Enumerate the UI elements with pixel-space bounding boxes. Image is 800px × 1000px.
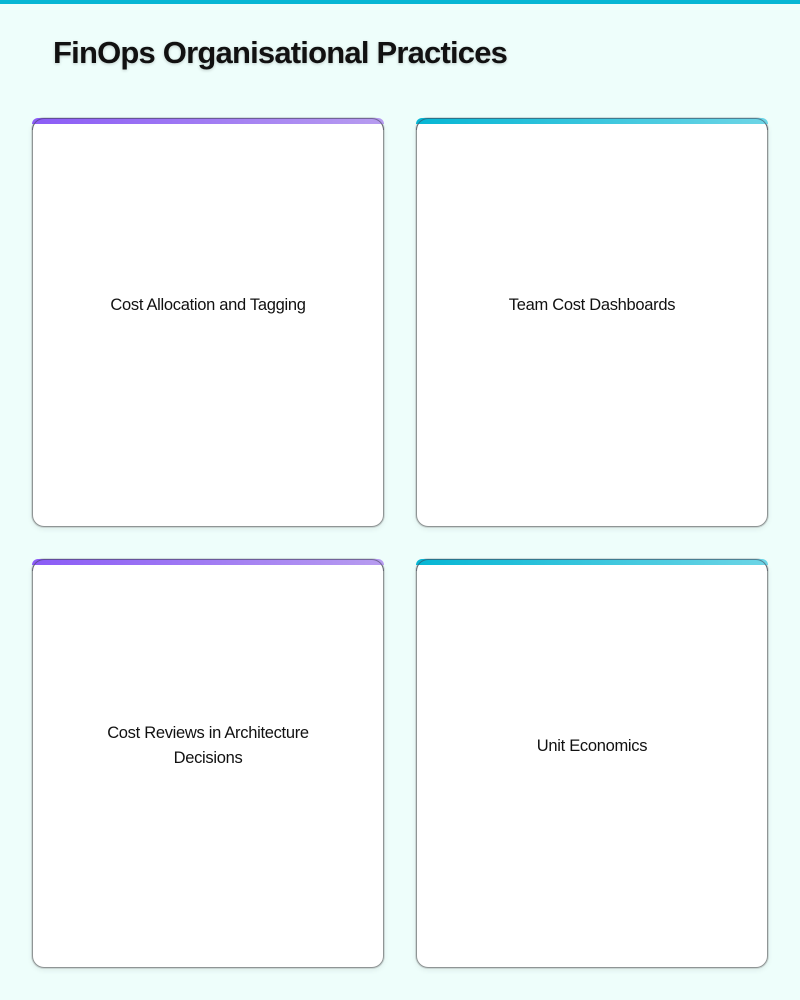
card label: cost reviews <box>107 724 309 767</box>
panel: unit economics <box>416 559 768 968</box>
panel: cost reviews in architecture decisions <box>32 559 384 968</box>
purple card header bar <box>32 559 384 565</box>
card label: cost reviews: Decisions <box>174 749 242 767</box>
teal card header bar <box>416 118 768 124</box>
card label: cost allocation: Cost Allocation and Tagging <box>110 296 306 314</box>
card label: cost reviews: Cost Reviews in Architecture <box>107 724 309 742</box>
panel: cost allocation and tagging <box>32 118 384 527</box>
title: FinOps Organisational Practices <box>53 35 507 70</box>
card label: unit economics: Unit Economics <box>537 737 647 755</box>
top accent bar <box>0 0 800 4</box>
teal card header bar <box>416 559 768 565</box>
panel: team cost dashboards <box>416 118 768 527</box>
purple card header bar <box>32 118 384 124</box>
card label: team dashboards: Team Cost Dashboards <box>509 296 675 314</box>
